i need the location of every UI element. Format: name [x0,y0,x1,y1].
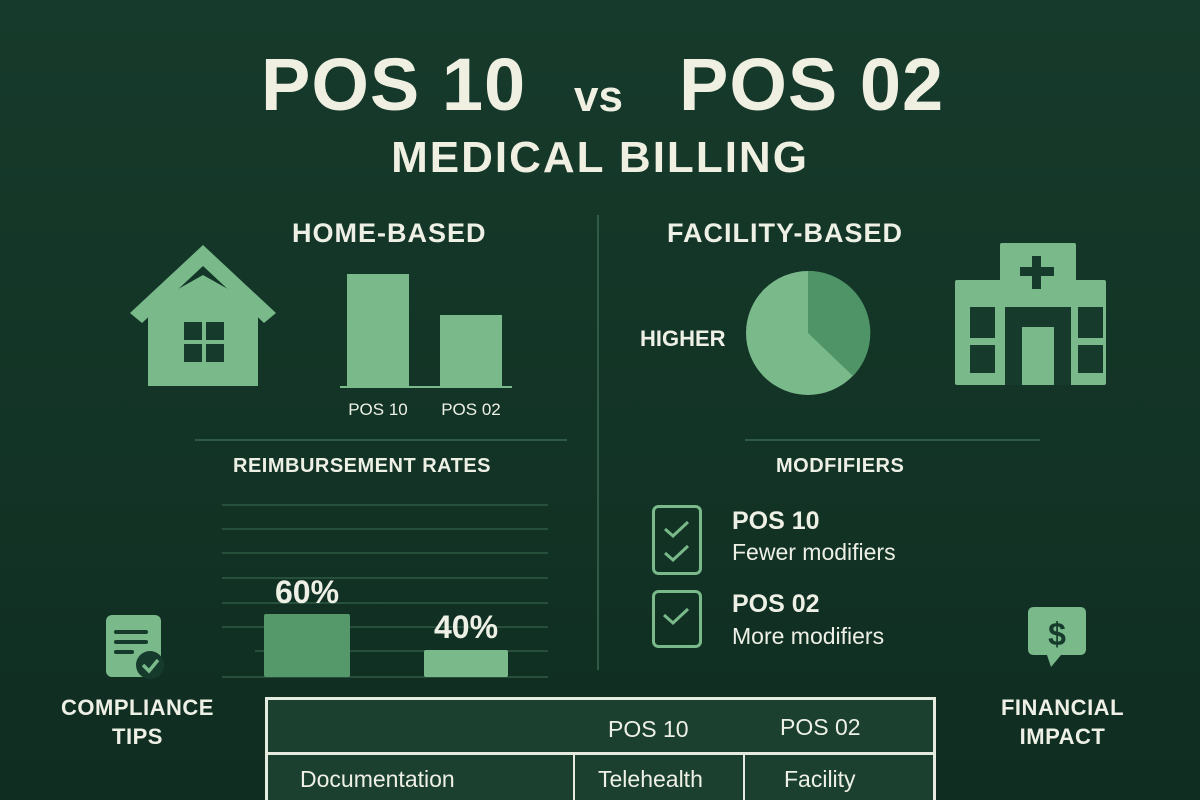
modifier item: pos 10 [652,505,896,575]
modifier item: pos 02: POS 02 [732,590,820,618]
icon: dollar tag [1028,607,1086,667]
heading: home-based: HOME-BASED [292,218,487,248]
title: POS 10 [261,43,526,126]
subtitle: MEDICAL BILLING [391,133,809,182]
compliance tips [61,615,214,749]
title [261,43,944,126]
compliance tips: COMPLIANCE [61,695,214,720]
bar chart: pos10 vs pos02: POS 10 [348,400,408,419]
modifier item: pos 10: POS 10 [732,507,820,535]
icon: house [130,245,276,386]
bar chart: pos10 vs pos02: POS 02 [441,400,501,419]
title: POS 02 [679,43,944,126]
icon: double check [652,505,702,575]
icon: dollar tag: $ [1048,616,1066,652]
bar chart: pos10 vs pos02 [340,274,512,419]
comparison table: Facility [784,766,856,792]
compliance tips: TIPS [112,724,163,749]
financial impact [1001,607,1124,749]
icon: check [652,590,702,648]
vertical divider [597,215,599,670]
icon: hospital [955,243,1106,385]
heading: facility-based: FACILITY-BASED [667,218,903,248]
modifier item: pos 10: Fewer modifiers [732,539,896,565]
chart: reimbursement rates: 60% [275,574,339,610]
comparison table: Telehealth [598,766,703,792]
chart: reimbursement rates: 40% [434,609,498,645]
icon: checklist document [106,615,164,679]
modifier item: pos 02 [652,590,884,649]
modifier item: pos 02: More modifiers [732,623,884,649]
chart: reimbursement rates [222,504,548,678]
comparison table [265,697,936,800]
financial impact: IMPACT [1020,724,1105,749]
comparison table: POS 10 [608,716,689,742]
heading: modifiers: MODFIFIERS [776,455,904,477]
title: vs [574,72,623,121]
pie chart [746,271,870,395]
horizontal dividers [195,439,567,441]
financial impact: FINANCIAL [1001,695,1124,720]
comparison table: Documentation [300,766,455,792]
label: higher: HIGHER [640,326,726,351]
comparison table: POS 02 [780,714,861,740]
heading: reimbursement rates: REIMBURSEMENT RATES [233,455,491,477]
